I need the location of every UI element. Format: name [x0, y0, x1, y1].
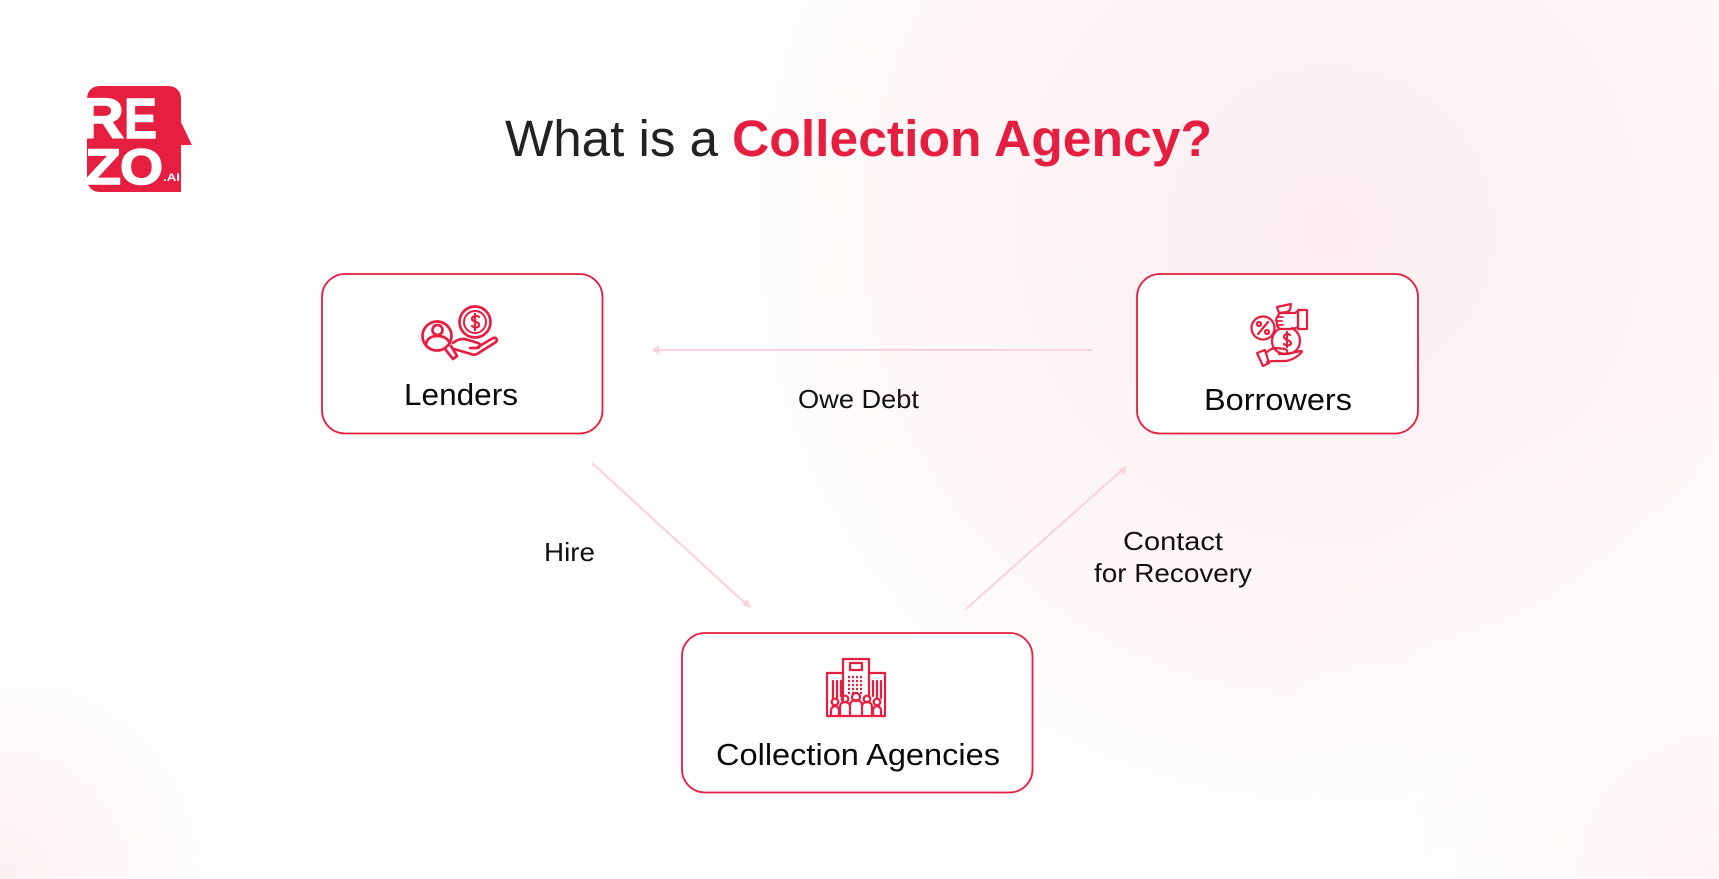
title: What is a	[505, 110, 719, 167]
label: Owe Debt: Owe Debt	[798, 384, 920, 414]
icon: money bag, percent and hands	[1252, 304, 1307, 366]
panel: Borrowers	[1137, 274, 1418, 434]
arrow: collection agencies to borrowers	[966, 466, 1127, 609]
label: Contact for Recovery	[1094, 526, 1252, 588]
label: Contact for Recovery: Contact	[1123, 526, 1224, 556]
logo: Rezo.ai: E	[124, 87, 157, 151]
heading: Lenders: Lenders	[404, 377, 518, 412]
arrow: lenders to collection agencies	[592, 463, 751, 608]
heading: Collection Agencies: Collection Agencies	[716, 737, 1000, 772]
logo: Rezo.ai: O	[120, 139, 163, 195]
label: Contact for Recovery: for Recovery	[1094, 558, 1252, 588]
label: Hire: Hire	[544, 537, 595, 567]
title: Collection Agency?	[732, 110, 1212, 167]
icon: magnifier person, coin and hand	[422, 306, 497, 359]
logo: Rezo.ai: .AI	[163, 172, 180, 184]
title	[505, 110, 1212, 167]
panel: Lenders	[322, 274, 602, 434]
logo: Rezo.ai: R	[80, 87, 124, 151]
logo: Rezo.ai: Z	[85, 139, 121, 195]
icon: office building with people	[827, 659, 885, 716]
logo: Rezo.ai	[80, 86, 192, 195]
panel: Collection Agencies	[682, 633, 1032, 792]
heading: Borrowers: Borrowers	[1204, 382, 1352, 417]
arrow: borrowers to lenders	[652, 345, 1092, 355]
